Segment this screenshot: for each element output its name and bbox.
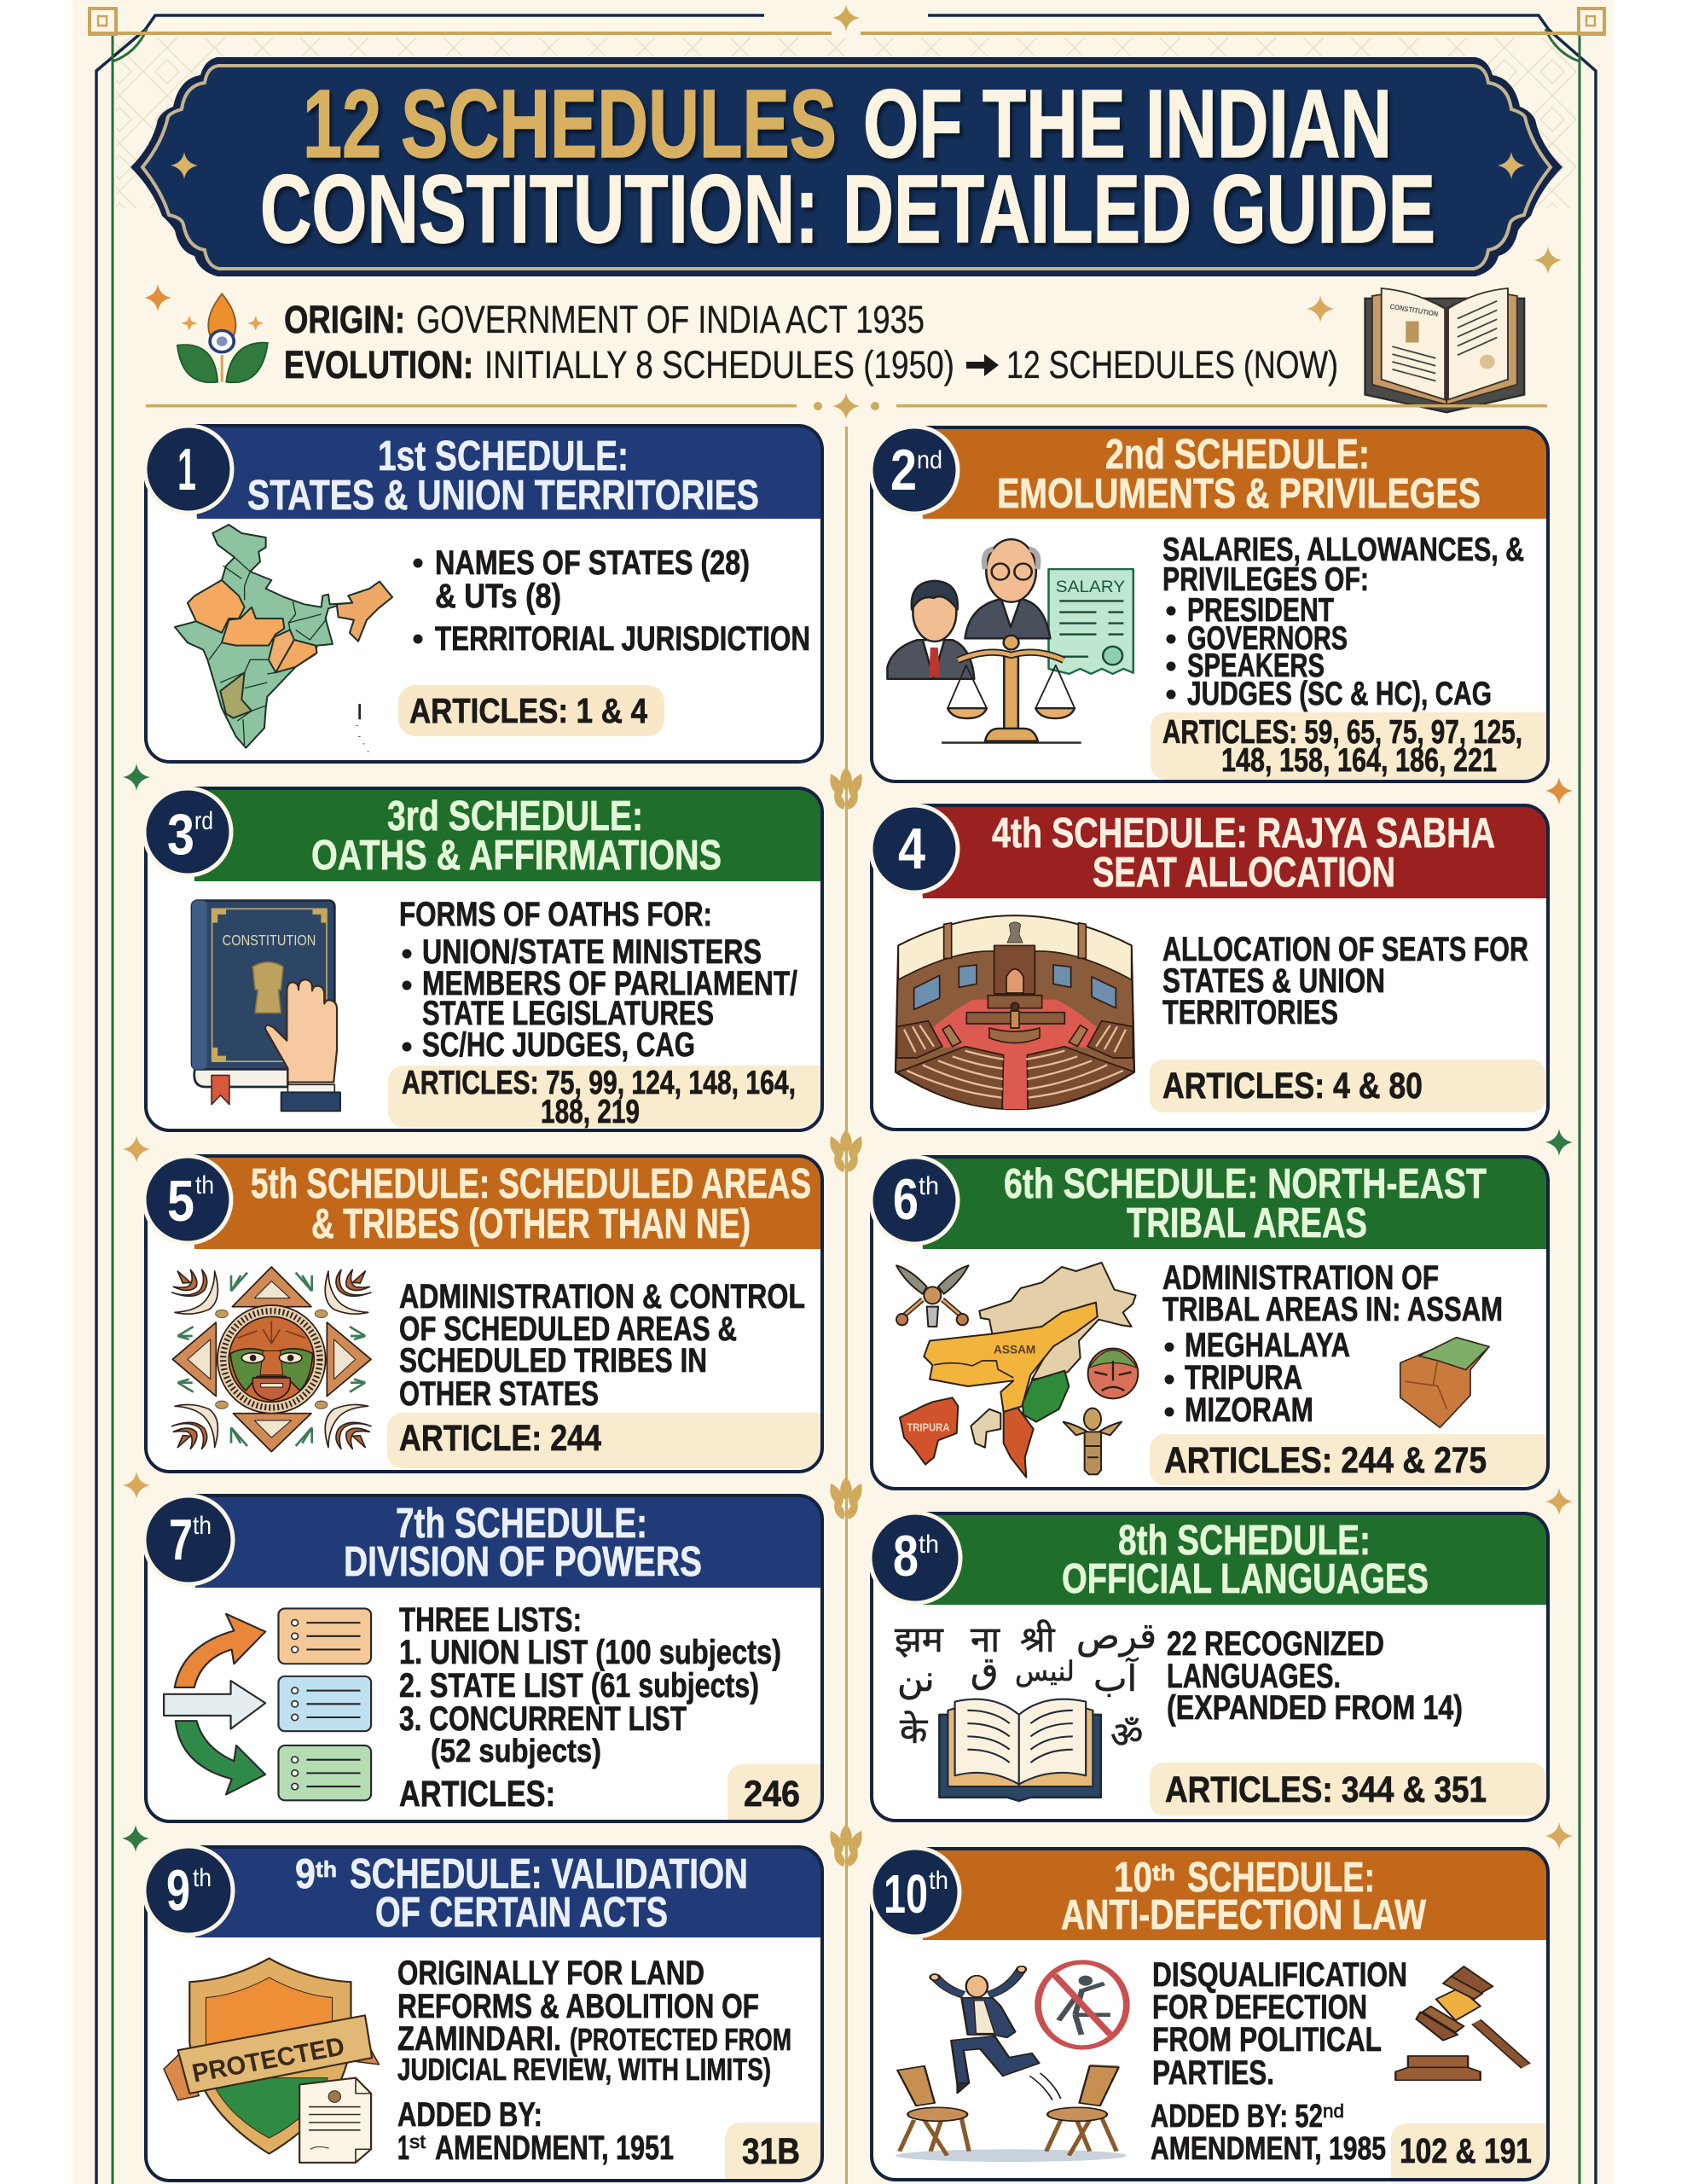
heading: OATHS & AFFIRMATIONS <box>311 833 722 879</box>
heading: 6th SCHEDULE: NORTH-EAST <box>1004 1161 1487 1207</box>
header band <box>188 1847 822 1937</box>
heading: TRIBAL AREAS <box>1127 1200 1367 1246</box>
origin and evolution text: EVOLUTION: <box>284 343 473 386</box>
central vertical gold divider with wheat ornaments <box>830 427 862 2184</box>
articles number: 31B <box>742 2131 800 2172</box>
script samples: لنيس <box>1015 1656 1075 1687</box>
icon: rajya sabha chamber <box>896 915 1134 1109</box>
origin and evolution text <box>284 298 1338 386</box>
articles text: 148, 158, 164, 186, 221 <box>1221 742 1497 779</box>
icon: tribal art motif <box>172 1267 371 1452</box>
body text: AMENDMENT, 1951 <box>435 2129 674 2167</box>
body text: SPEAKERS <box>1187 648 1325 684</box>
heading: 3rd SCHEDULE: <box>387 793 643 839</box>
heading: ANTI-DEFECTION LAW <box>1061 1892 1427 1938</box>
decorative stars <box>122 4 1573 1852</box>
icon: north-east map with tribal artefacts <box>896 1263 1138 1478</box>
number badge: 1 <box>177 436 196 502</box>
panel: 1st schedule <box>145 426 822 762</box>
arrow <box>966 354 999 376</box>
heading: 8th SCHEDULE: <box>1118 1518 1371 1564</box>
section separator <box>146 392 1547 420</box>
articles box <box>1151 712 1546 780</box>
heading: 1st SCHEDULE: <box>378 433 629 479</box>
body text: 1 <box>397 2129 409 2167</box>
body text: REFORMS & ABOLITION OF <box>397 1988 759 2025</box>
heading: 2nd SCHEDULE: <box>1105 432 1370 478</box>
heading: 9 <box>295 1851 316 1897</box>
number badge: 7 <box>169 1507 193 1572</box>
number badge <box>871 1157 958 1244</box>
number badge: 6 <box>893 1167 919 1232</box>
icon: north-east map with tribal artefacts: ASSAM <box>994 1343 1035 1356</box>
icon: officials, salary slip and scales <box>887 539 1133 743</box>
heading: th <box>316 1856 337 1882</box>
number badge: th <box>193 1512 212 1540</box>
heading: SEAT ALLOCATION <box>1093 850 1395 896</box>
number badge: 2 <box>890 438 917 502</box>
number badge: th <box>195 1171 214 1199</box>
body text <box>413 544 810 658</box>
articles box <box>1391 2123 1546 2178</box>
body text: ADDED BY: 52 <box>1151 2099 1323 2135</box>
articles box <box>387 1413 822 1468</box>
heading: OF CERTAIN ACTS <box>375 1890 668 1936</box>
body text: ALLOCATION OF SEATS FOR <box>1162 931 1528 968</box>
script samples: ق <box>971 1650 999 1690</box>
islands marks <box>357 704 368 752</box>
script samples: آب <box>1093 1657 1139 1699</box>
body text <box>399 1278 805 1459</box>
icon: protected shield: PROTECTED <box>189 2031 347 2088</box>
body text: 3. CONCURRENT LIST <box>399 1700 687 1738</box>
body text: 22 RECOGNIZED <box>1167 1625 1384 1663</box>
number badge <box>144 788 231 875</box>
header band <box>915 1513 1548 1605</box>
origin and evolution text: INITIALLY 8 SCHEDULES (1950) <box>484 343 954 386</box>
articles box <box>1150 1434 1546 1485</box>
articles box <box>728 1764 822 1820</box>
panel: 9th schedule <box>144 1846 822 2181</box>
number badge <box>144 1156 231 1243</box>
body text: st <box>409 2131 426 2152</box>
heading: DIVISION OF POWERS <box>344 1539 702 1585</box>
articles text <box>402 1065 796 1130</box>
heading: 5th SCHEDULE: SCHEDULED AREAS <box>251 1161 811 1207</box>
icon: officials, salary slip and scales: SALARY <box>1056 578 1125 596</box>
script samples: ॐ <box>1110 1715 1143 1755</box>
heading <box>1062 1518 1429 1602</box>
icon: open constitution book <box>1365 288 1524 412</box>
heading: 7th SCHEDULE: <box>396 1501 647 1547</box>
header band <box>188 426 822 519</box>
articles number: 246 <box>744 1774 800 1815</box>
articles text: ARTICLES: 4 & 80 <box>1162 1066 1423 1107</box>
body text: (PROTECTED FROM <box>570 2022 791 2057</box>
body text: JUDICIAL REVIEW, WITH LIMITS) <box>397 2052 771 2087</box>
origin and evolution text: ORIGIN: <box>284 298 405 341</box>
heading: EMOLUMENTS & PRIVILEGES <box>997 471 1481 517</box>
body text: nd <box>1323 2100 1344 2122</box>
icon: three lists with arrows <box>164 1608 371 1800</box>
body text: MEMBERS OF PARLIAMENT/ <box>422 965 797 1002</box>
title text: 12 SCHEDULES <box>303 70 837 177</box>
articles text: ARTICLES: 75, 99, 124, 148, 164, <box>402 1065 796 1101</box>
number badge: 3 <box>167 802 194 867</box>
heading: 4th SCHEDULE: RAJYA SABHA <box>992 810 1495 857</box>
header band <box>188 788 822 881</box>
articles text: ARTICLE: 244 <box>399 1418 601 1459</box>
script samples: झम <box>895 1619 944 1659</box>
body text: PARTIES. <box>1152 2054 1274 2092</box>
body text <box>1151 1956 1532 2170</box>
body text: DISQUALIFICATION <box>1152 1956 1407 1994</box>
heading <box>311 793 722 879</box>
number badge: 9 <box>166 1858 190 1923</box>
script samples: نن <box>897 1658 935 1699</box>
body text: TERRITORIAL JURISDICTION <box>435 620 810 658</box>
body text: MEGHALAYA <box>1185 1327 1350 1364</box>
body text <box>1162 1259 1503 1481</box>
header band <box>914 805 1548 898</box>
body text: PRIVILEGES OF: <box>1162 561 1369 598</box>
number badge <box>871 427 958 514</box>
script samples <box>895 1616 1157 1755</box>
heading <box>344 1501 702 1585</box>
body text: LANGUAGES. <box>1167 1658 1341 1695</box>
body text: ADDED BY: <box>397 2096 542 2134</box>
number badge: 10 <box>884 1863 928 1925</box>
title text: OF THE INDIAN <box>863 70 1392 177</box>
body text <box>1162 531 1524 779</box>
body text: ZAMINDARI. <box>397 2020 561 2058</box>
header band <box>914 1157 1548 1249</box>
panel: 8th schedule <box>870 1513 1548 1821</box>
number badge: 5 <box>167 1169 194 1234</box>
panel: 2nd schedule <box>871 427 1548 781</box>
body text: THREE LISTS: <box>399 1601 582 1639</box>
articles pill: ARTICLES: 1 & 4 <box>409 691 647 730</box>
articles box <box>388 1066 822 1127</box>
body text <box>399 1601 800 1815</box>
title text <box>260 70 1435 263</box>
articles box <box>1150 1060 1545 1112</box>
body text: FOR DEFECTION <box>1152 1989 1367 2026</box>
number badge <box>871 805 958 892</box>
decorative lace behind banner <box>116 38 1576 208</box>
number badge <box>870 1513 960 1603</box>
body text: SALARIES, ALLOWANCES, & <box>1162 531 1524 568</box>
body text <box>1165 1625 1487 1810</box>
header band <box>914 427 1548 519</box>
heading <box>247 433 759 519</box>
heading: & TRIBES (OTHER THAN NE) <box>311 1201 751 1247</box>
articles text: ARTICLES: 244 & 275 <box>1164 1440 1487 1481</box>
body text <box>397 1955 800 2172</box>
body text: 2. STATE LIST (61 subjects) <box>399 1667 759 1705</box>
body text: AMENDMENT, 1985 <box>1151 2131 1386 2167</box>
icon: lotus with chakra <box>177 293 268 382</box>
heading: SCHEDULE: <box>1187 1855 1375 1901</box>
body text: FORMS OF OATHS FOR: <box>399 896 712 933</box>
number badge: nd <box>917 446 942 474</box>
number badge: 8 <box>893 1524 919 1589</box>
body text: GOVERNORS <box>1187 620 1348 657</box>
script samples: श्री <box>1020 1619 1056 1659</box>
body text: TRIPURA <box>1185 1359 1302 1397</box>
header band <box>915 1849 1548 1940</box>
body text: ADMINISTRATION & CONTROL <box>399 1278 805 1316</box>
body text: OTHER STATES <box>399 1375 599 1413</box>
body text <box>399 896 797 1130</box>
icon: india map <box>175 525 392 752</box>
header band <box>188 1496 822 1588</box>
heading <box>251 1161 811 1247</box>
body text: STATES & UNION <box>1162 962 1385 1000</box>
script samples: ना <box>971 1619 1000 1659</box>
body text: SC/HC JUDGES, CAG <box>422 1026 695 1064</box>
body text: ORIGINALLY FOR LAND <box>397 1955 704 1992</box>
body text: OF SCHEDULED AREAS & <box>399 1310 737 1348</box>
body text: ADMINISTRATION OF <box>1162 1259 1439 1297</box>
articles number: 102 & 191 <box>1400 2131 1532 2170</box>
body text <box>1162 931 1528 1107</box>
title banner <box>130 57 1562 276</box>
script samples: के <box>900 1711 928 1751</box>
number badge <box>871 1848 959 1937</box>
articles text: 188, 219 <box>541 1094 640 1130</box>
panel: 4th schedule <box>871 805 1548 1130</box>
body text: FROM POLITICAL <box>1152 2021 1382 2059</box>
number badge: 4 <box>898 816 925 881</box>
number badge: th <box>919 1172 939 1200</box>
heading <box>1061 1855 1427 1938</box>
panel: 6th schedule <box>871 1157 1548 1489</box>
header band <box>188 1156 822 1249</box>
heading <box>295 1851 748 1936</box>
body text: UNION/STATE MINISTERS <box>422 933 762 971</box>
panel: 5th schedule <box>144 1156 822 1472</box>
articles text: ARTICLES: 344 & 351 <box>1165 1769 1487 1810</box>
body text: ARTICLES: <box>399 1774 555 1815</box>
heading: th <box>1152 1860 1175 1885</box>
articles box <box>725 2123 822 2179</box>
panel: 10th schedule <box>871 1848 1548 2180</box>
body text: JUDGES (SC & HC), CAG <box>1187 676 1492 712</box>
panel: 3rd schedule <box>144 788 822 1130</box>
number badge: th <box>193 1864 212 1892</box>
body text: (52 subjects) <box>431 1734 601 1769</box>
number badge <box>145 426 232 513</box>
body text: STATE LEGISLATURES <box>422 995 714 1032</box>
number badge: th <box>929 1867 948 1895</box>
icon: protected shield <box>164 1958 379 2163</box>
icon: defector jumping between chairs, no-defection sign and gavel <box>896 1962 1526 2162</box>
articles pill <box>398 685 664 736</box>
number badge: th <box>919 1531 939 1559</box>
body text: SCHEDULED TRIBES IN <box>399 1342 707 1380</box>
heading <box>992 810 1495 896</box>
title text: CONSTITUTION: <box>260 155 819 263</box>
icon: north-east map with tribal artefacts: TRIPURA <box>907 1421 949 1433</box>
number badge: rd <box>194 807 213 835</box>
body text: TRIBAL AREAS IN: ASSAM <box>1162 1291 1503 1328</box>
heading <box>1004 1161 1487 1246</box>
script samples: قرص <box>1076 1616 1157 1657</box>
articles box <box>1150 1763 1545 1815</box>
body text: TERRITORIES <box>1162 994 1338 1031</box>
articles text: ARTICLES: 59, 65, 75, 97, 125, <box>1162 714 1522 751</box>
body text: (EXPANDED FROM 14) <box>1167 1689 1463 1727</box>
origin and evolution text: GOVERNMENT OF INDIA ACT 1935 <box>416 298 925 341</box>
number badge <box>144 1846 233 1935</box>
heading: OFFICIAL LANGUAGES <box>1062 1556 1429 1602</box>
body text: & UTs (8) <box>435 578 561 615</box>
heading <box>997 432 1481 517</box>
icon: constitution book with hand <box>192 901 340 1111</box>
articles text <box>1162 714 1522 779</box>
body text: MIZORAM <box>1185 1391 1313 1429</box>
body text: NAMES OF STATES (28) <box>435 544 750 582</box>
panel: 7th schedule <box>144 1496 822 1821</box>
icon: open book <box>939 1699 1101 1801</box>
body text: PRESIDENT <box>1187 592 1334 629</box>
body text: 1. UNION LIST (100 subjects) <box>399 1634 781 1671</box>
origin and evolution text: 12 SCHEDULES (NOW) <box>1006 343 1338 386</box>
icon: folded map <box>1400 1338 1489 1427</box>
title text: DETAILED GUIDE <box>843 155 1435 263</box>
number badge <box>144 1496 233 1584</box>
icon: open constitution book: CONSTITUTION <box>1389 302 1439 318</box>
icon: constitution book with hand: CONSTITUTION <box>223 932 316 949</box>
heading: SCHEDULE: VALIDATION <box>350 1851 748 1897</box>
heading: 10 <box>1114 1855 1152 1901</box>
heading: STATES & UNION TERRITORIES <box>247 473 759 519</box>
